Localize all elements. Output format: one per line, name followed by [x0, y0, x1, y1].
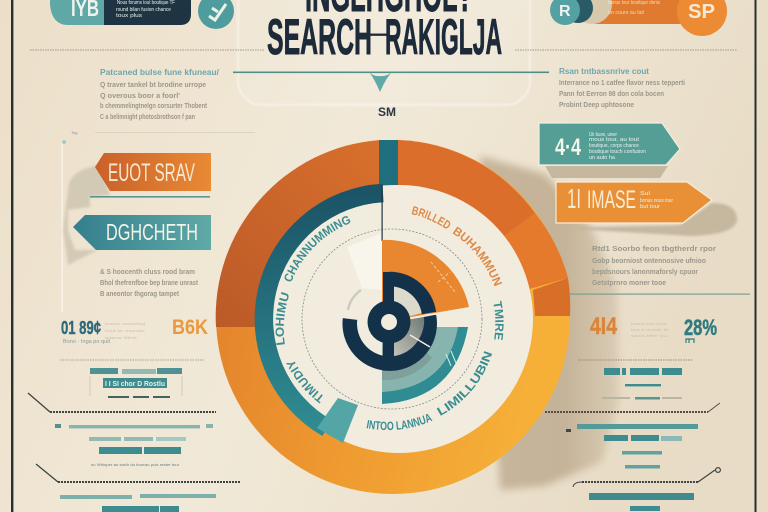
text block: top right: Rsan tntbassnrive cout — [559, 67, 649, 76]
stat: right caption: bonus toux bons — [631, 321, 667, 326]
ribbon: orange left: EUOT SRAV — [108, 159, 195, 187]
lower left bar group 1 — [60, 360, 205, 398]
text block: top right — [559, 67, 685, 109]
text block: mid right: Getstprnro moner tooe — [592, 280, 666, 287]
seam — [382, 185, 383, 241]
text block: top right: Pann fot Eerron 98 don cola bocen — [559, 91, 664, 98]
curved labels: TMIRE — [494, 300, 504, 340]
top left badge — [50, 0, 191, 25]
stat: left caption: bonus mourning — [105, 321, 145, 326]
top right badge: R — [559, 3, 571, 20]
curved labels: LIMILLUBIN — [436, 351, 492, 416]
connector: lower right 1 — [545, 403, 720, 412]
lower right bar group 2 — [566, 424, 698, 468]
ribbon: teal left — [73, 215, 211, 250]
gray sector upper — [389, 283, 425, 322]
text block: top left: Patcaned bulse fune kfuneau/ — [100, 68, 220, 77]
stat: right caption: tout le monde fin — [631, 327, 669, 332]
text block: top left: b chemmelingtnelgn corsurter Thobent — [100, 103, 208, 110]
dotted header rules — [30, 49, 737, 51]
label: SM: SM — [378, 105, 396, 119]
ribbon: orange right: IMASE — [587, 186, 636, 214]
ribbon: teal right: boutique, corps chance — [589, 143, 639, 149]
shadow behind chart — [480, 156, 620, 490]
tick marks on teal — [446, 351, 456, 366]
ribbon: orange right: but tour — [640, 204, 660, 210]
connector: lower right 2 — [573, 468, 720, 487]
ribbon: orange right — [556, 182, 712, 223]
ribbon shadows left — [63, 165, 110, 265]
light teal wedge — [317, 398, 358, 443]
left axis line: Tag — [71, 130, 77, 135]
icon: top left check circle — [198, 0, 234, 29]
text block: mid right — [592, 246, 716, 287]
segment: dark right block — [533, 278, 570, 316]
text block: mid right: bepdsnours lanonmaforsly cpuor — [592, 269, 698, 276]
lower left bar group 3 — [60, 494, 216, 512]
teal ring — [264, 193, 383, 428]
stat: left caption — [63, 321, 146, 345]
stat: left teal number: 01 89¢ — [61, 318, 101, 338]
ribbon: orange right: bonus nous tour — [640, 198, 673, 204]
lower right bar group 1 — [578, 360, 693, 400]
faint arc — [348, 290, 361, 310]
teal top block — [379, 140, 398, 185]
curved labels — [275, 216, 504, 430]
curved labels: INTOO LANNUA — [366, 414, 432, 430]
text: RAKIGLJA — [385, 9, 502, 65]
lower left bar group 2: so Whisper au sortir du bureau puis rester tout — [91, 462, 180, 467]
text block: mid right: Gobp beorniost ontennosive ufnioo — [592, 258, 706, 265]
ribbon: teal right: boutique touch confusion — [589, 149, 646, 155]
top right badge: bonus tour boutique denis — [608, 0, 660, 6]
text block: top left — [100, 68, 220, 121]
ribbon: teal right: 4·4 — [555, 134, 581, 161]
top left badge: round bilan fusion chance — [116, 7, 171, 13]
ribbon: orange right: 1I — [567, 183, 581, 214]
text block: top left: Q overous boor a foorl' — [100, 93, 180, 100]
icon: small glyph under stat — [686, 339, 694, 343]
outer disc — [216, 140, 570, 494]
left highlight — [347, 233, 382, 290]
ribbon: teal right: un auto ha — [589, 155, 615, 161]
top right badge: SP — [688, 1, 715, 23]
lower right bar group 3 — [589, 493, 694, 511]
text block: mid left: B aneontor thgorag tampet — [100, 291, 180, 298]
teal title rule — [233, 72, 549, 73]
icon: chevron emblem — [369, 72, 392, 92]
ribbon: teal right — [539, 123, 680, 178]
text block: mid left — [100, 269, 199, 298]
navy bar — [383, 272, 394, 369]
ribbon: teal left: DGHCHETH — [106, 219, 198, 245]
stat: left caption: sans titre — [105, 335, 139, 340]
ribbon: orange right: Sul — [640, 191, 650, 197]
text block: top left: Q traver tankel bt brodine urrope — [100, 82, 206, 89]
navy hub — [368, 300, 410, 344]
left axis line — [62, 130, 255, 312]
stat: right orange number: 4I4 — [590, 313, 618, 340]
white hub — [381, 314, 397, 330]
top right badge — [550, 0, 727, 36]
ribbon: teal right: Uk buse, uiver — [589, 132, 617, 138]
text block: top right: Probint Deep uphtosone — [559, 102, 634, 109]
text block: mid right: Rtd1 Soorbo feon tbgtherdr rpor — [592, 246, 716, 253]
inner cream disc — [265, 185, 533, 453]
dashed ring — [302, 229, 482, 409]
top left badge: toux plus — [116, 13, 143, 19]
glass title panel — [238, 0, 530, 105]
stat: right caption — [631, 321, 669, 338]
text block: top left: C a belimnight photosbrothson f pan — [100, 114, 195, 121]
rule mid right — [570, 294, 750, 295]
lower left bar group 1: I I SI chor D Rostlu — [105, 381, 165, 388]
rule under orange ribbon — [90, 196, 210, 198]
donut chart — [216, 140, 570, 494]
stat: right caption: sans titre ou — [631, 333, 667, 338]
curved orange labels: BUHAMMUN — [452, 226, 502, 286]
curved orange labels — [412, 206, 502, 286]
curved labels: TIMUDIY — [286, 362, 323, 404]
ribbon: orange left — [95, 153, 211, 191]
sector: teal lower — [382, 327, 468, 404]
curved labels: LOHIMU — [275, 292, 289, 346]
lower left bar group 2 — [55, 424, 213, 467]
gray sector lower — [394, 317, 424, 356]
connector: lower left 1 — [28, 393, 216, 412]
title: SEARCH — [267, 9, 372, 65]
navy ring — [350, 279, 430, 364]
text block: mid left: Bhol thefrenfboe bep brane unrast — [100, 280, 199, 287]
ribbon: teal right: mous tour, au tout — [589, 137, 640, 143]
shadow under orange right ribbon — [558, 203, 737, 236]
stat: left orange number: B6K — [172, 316, 208, 339]
segment: upper left — [216, 140, 383, 327]
segment: upper right — [398, 140, 535, 300]
text block: mid left: & S hoocenth cluss rood bram — [100, 269, 195, 276]
stat: left caption: Bono · Inga po quit — [63, 339, 111, 345]
text block: top right: Interrance no 1 catfee flavor ness tepperti — [559, 80, 685, 87]
top right badge: un cours au lait — [608, 10, 645, 16]
tick marks on orange — [431, 262, 455, 292]
connector: lower left 2 — [36, 464, 240, 482]
stat: left caption: tout le monde — [105, 328, 146, 333]
curved orange labels: BRILLED — [412, 206, 450, 228]
white spokes — [410, 314, 437, 347]
stat: right teal number: 28% — [684, 315, 717, 340]
top left badge: Nous forums tout boutique TF — [117, 0, 175, 6]
curved labels: CHANNUMMING — [284, 216, 350, 282]
segment: mid right — [420, 213, 568, 320]
sector: orange — [382, 240, 469, 322]
